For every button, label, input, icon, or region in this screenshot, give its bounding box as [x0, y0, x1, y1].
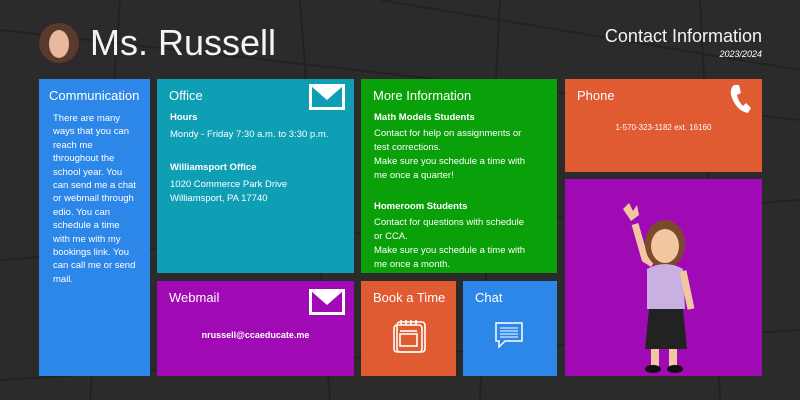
panel: office: Mondy - Friday 7:30 a.m. to 3:30 p.m. Williamsport Office [170, 129, 328, 173]
panel: more information: Make sure you schedule a time with me once a quarter! [374, 156, 525, 181]
icon: chat bubble [495, 322, 523, 349]
panel: office [157, 79, 354, 273]
panel: communication [39, 79, 150, 376]
panel: communication: Communication [49, 88, 139, 103]
title: Ms. Russell [90, 22, 276, 63]
icon: phone [730, 85, 751, 113]
panel: phone [565, 79, 762, 172]
panel: webmail [157, 281, 354, 376]
panel: more information: Math Models Students Homeroom Students [374, 112, 475, 212]
panel: phone: Phone [577, 88, 615, 103]
panel: more information [361, 79, 557, 273]
panel: webmail: nrussell@ccaeducate.me [202, 330, 309, 340]
panel: communication: There are many ways that you can reach me throughout the school year. You can send me a chat or webmail through edio. You can schedule a time with me with my bookings link. You can call me or send mail. [53, 113, 136, 285]
panel: book a time: Book a Time [373, 290, 445, 305]
panel: bitmoji [565, 179, 762, 376]
panel: more information: Make sure you schedule a time with me once a month. [374, 245, 525, 270]
icon: envelope [309, 289, 345, 315]
panel: webmail: Webmail [169, 290, 219, 305]
panel: office: 1020 Commerce Park Drive [170, 179, 287, 190]
panel: more information: Contact for questions with schedule or CCA. [374, 217, 524, 242]
header right [605, 26, 762, 59]
panel: chat: Chat [475, 290, 502, 305]
panel: more information: More Information [373, 88, 471, 103]
panel: office: Williamsport, PA 17740 [170, 193, 268, 204]
avatar [39, 23, 79, 63]
header right: Contact Information [605, 26, 762, 46]
panel: office: Office [169, 88, 203, 103]
header right: 2023/2024 [719, 49, 762, 59]
panel: more information: Contact for help on assignments or test corrections. [374, 128, 521, 153]
icon: calendar [393, 320, 426, 353]
panel: book a time [361, 281, 456, 376]
panel: office: Hours [170, 112, 197, 123]
panel: phone: 1-570-323-1182 ext. 16160 [616, 123, 711, 132]
panel: chat [463, 281, 557, 376]
icon: envelope [309, 84, 345, 110]
